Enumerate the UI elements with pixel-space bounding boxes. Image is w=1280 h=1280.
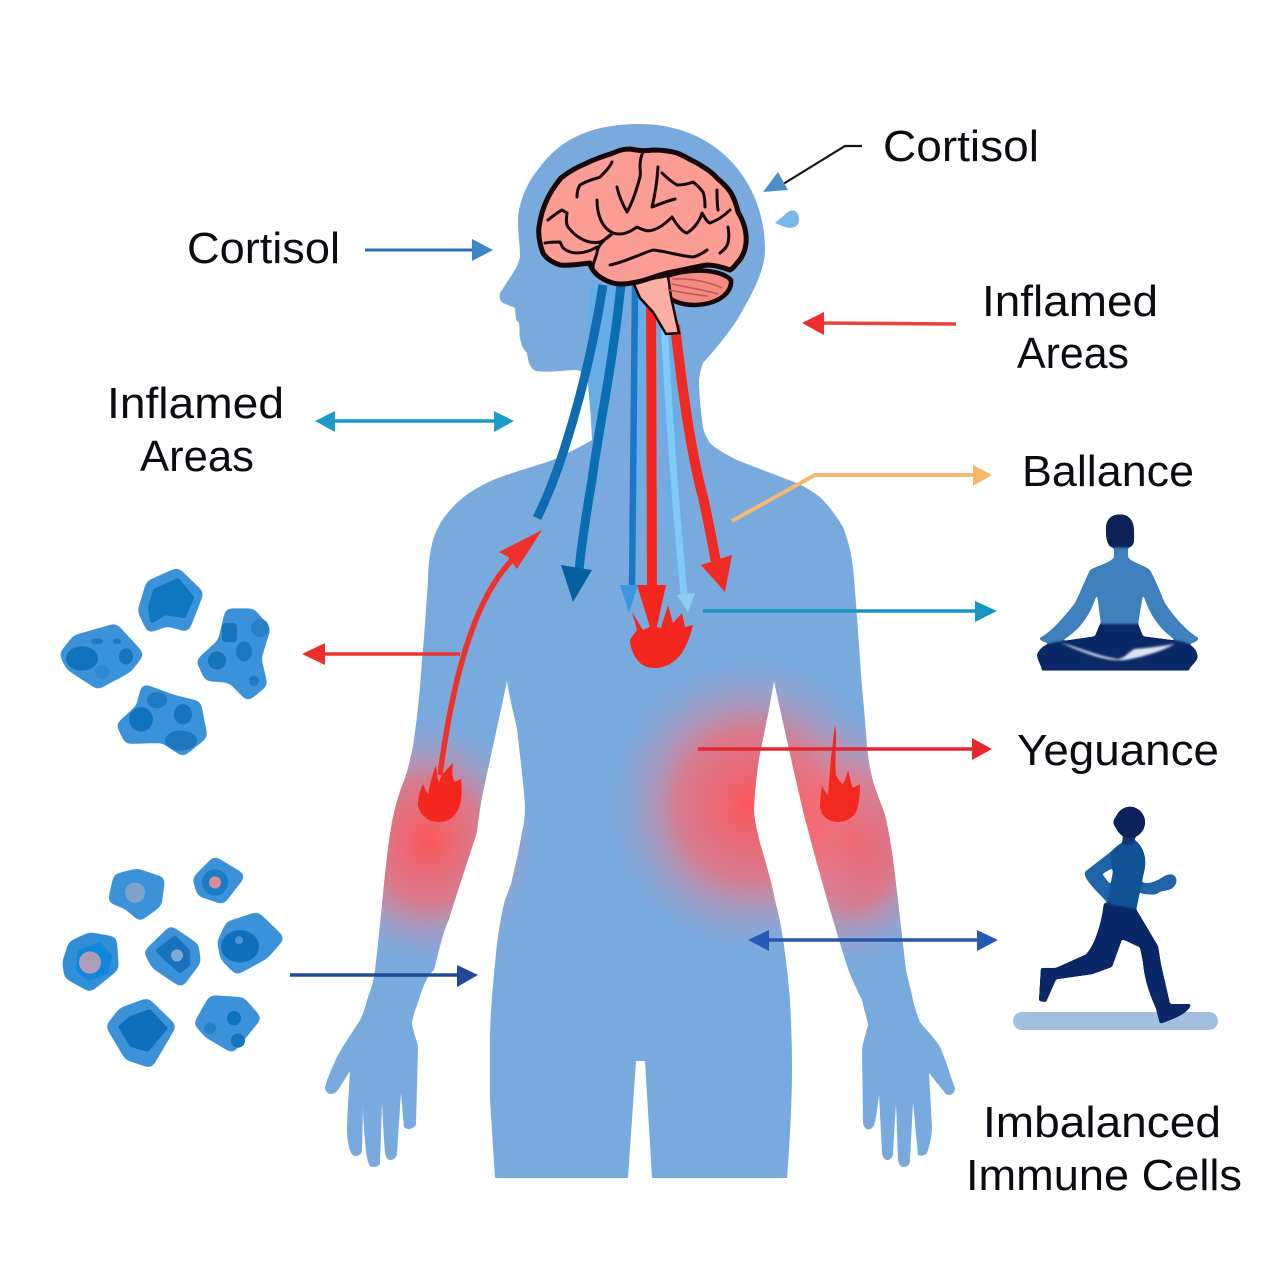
label: inflamed areas left: Areas [140, 432, 254, 481]
arrow: right cortisol [763, 146, 862, 192]
crossed legs [1037, 624, 1197, 670]
upper body [1039, 545, 1199, 644]
inner highlight [1060, 643, 1175, 660]
inflammation glows [378, 285, 902, 956]
front arm [1141, 874, 1176, 894]
body silhouette [325, 124, 955, 1178]
label: inflamed areas left [107, 379, 284, 481]
rear arm [1085, 841, 1125, 905]
cell right [201, 613, 269, 696]
cell f [110, 1002, 172, 1064]
arrow: immune cells to body [290, 965, 478, 987]
legs [1039, 903, 1191, 1024]
cell b [197, 861, 240, 900]
flame: left forearm [418, 763, 462, 822]
flame: right forearm [820, 725, 860, 822]
dark blue arrow [561, 285, 621, 602]
double arrow: inflamed left [315, 411, 514, 432]
cerebrum [539, 149, 746, 284]
arrow: balance [732, 465, 992, 521]
light blue arrow [664, 320, 695, 612]
neck arrows [537, 285, 732, 640]
double arrow: to runner [748, 930, 998, 951]
label: inflamed areas right: Areas [1017, 329, 1129, 378]
cell left [64, 628, 139, 685]
label: inflamed areas right [982, 277, 1158, 378]
cell c [66, 936, 115, 988]
label: imbalanced immune cells: Imbalanced [983, 1098, 1221, 1147]
head [1114, 807, 1145, 838]
neck light bands [588, 285, 682, 490]
arrow: to yeguance [698, 738, 992, 760]
red centre arrow [637, 285, 666, 640]
label: inflamed areas right: Inflamed [982, 277, 1158, 326]
droplet [775, 210, 799, 228]
torso [1107, 840, 1145, 910]
immune cells: large group [64, 572, 269, 752]
curved arrow [440, 530, 542, 775]
blue arrow [620, 285, 638, 613]
human body figure [318, 124, 955, 1178]
figure: meditation [1037, 514, 1199, 670]
cell top [142, 572, 199, 628]
cell d [148, 930, 197, 983]
cerebellum [665, 271, 731, 305]
cell e [221, 916, 280, 971]
cell bottom [121, 689, 203, 752]
cell g [198, 999, 257, 1049]
label: yeguance: Yeguance [1017, 726, 1219, 775]
label: imbalanced immune cells [966, 1098, 1242, 1200]
brain folds [545, 152, 730, 267]
label: cortisol left: Cortisol [187, 224, 340, 273]
brain stem [633, 276, 679, 334]
arrow: left cortisol [365, 239, 493, 261]
arrow: inflamed right [802, 312, 956, 335]
cell a [112, 872, 161, 917]
label: imbalanced immune cells: Immune Cells [966, 1151, 1242, 1200]
immune cells: small group [66, 861, 280, 1064]
head [1106, 514, 1134, 548]
figure: runner [1039, 807, 1191, 1024]
brain [539, 149, 746, 334]
arrow: to meditation [703, 601, 997, 622]
cerebellum folds [668, 279, 722, 296]
neck [1122, 831, 1136, 845]
dark blue descending line [537, 285, 603, 518]
red arrow right [675, 325, 732, 592]
label: inflamed areas left: Inflamed [107, 379, 284, 428]
label: cortisol right: Cortisol [883, 122, 1039, 171]
ground under runner [1013, 1012, 1218, 1030]
flame: chest [630, 605, 693, 668]
label: ballance: Ballance [1022, 447, 1194, 496]
arrow: red to immune cells [302, 643, 460, 665]
